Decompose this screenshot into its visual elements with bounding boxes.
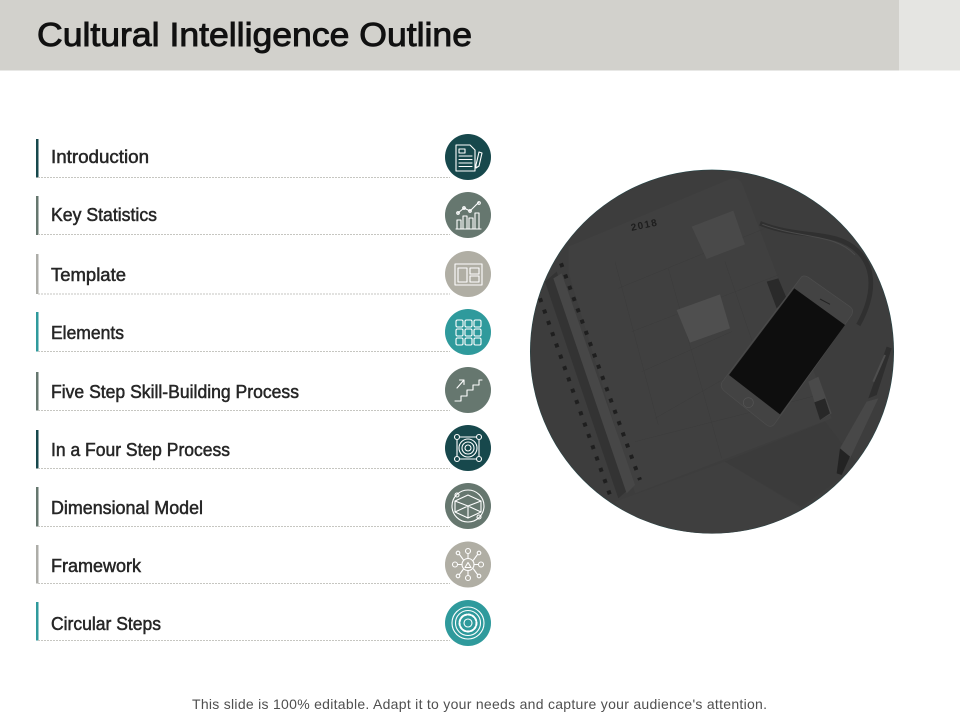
list item: Dimensional Model: Dimensional Model <box>51 498 203 518</box>
list item: Introduction: Introduction <box>51 147 149 167</box>
phone screen <box>729 288 845 414</box>
spiral binding <box>545 272 633 498</box>
list item: Five Step Skill-Building Process: Five Step Skill-Building Process <box>51 382 299 402</box>
icon: document and pen <box>445 134 491 180</box>
icon: circular steps gear <box>445 600 491 646</box>
icon: four step cycle <box>445 425 491 471</box>
list item: In a Four Step Process: In a Four Step Process <box>51 440 230 460</box>
planner year: 2018 <box>630 217 659 234</box>
dotted speaker and pen at right <box>840 398 878 458</box>
footer caption: This slide is 100% editable. Adapt it to your needs and capture your audience's attention. <box>192 696 767 712</box>
icon: bar and line chart <box>445 192 491 238</box>
list item: Framework: Framework <box>51 556 142 576</box>
watch strap <box>767 278 787 308</box>
calendar photo squares <box>692 211 745 259</box>
phone home button <box>743 398 753 408</box>
icon: dimensional cube <box>445 483 491 529</box>
planner grid <box>615 228 818 458</box>
list item: Template: Template <box>51 265 126 285</box>
title: Cultural Intelligence Outline <box>37 16 472 53</box>
icon: layout template <box>445 251 491 297</box>
photo: planner and phone on a desk <box>525 165 902 542</box>
planner page <box>568 178 832 493</box>
phone body <box>721 276 853 426</box>
list item: Elements: Elements <box>51 323 124 343</box>
list item: Circular Steps: Circular Steps <box>51 614 161 634</box>
cable <box>760 223 871 325</box>
icon: grid of elements <box>445 309 491 355</box>
icon: stairs with arrow <box>445 367 491 413</box>
desk shadow below planner <box>618 507 793 534</box>
icon: framework network <box>445 542 491 588</box>
header band <box>0 0 960 70</box>
list item: Key Statistics: Key Statistics <box>51 205 157 225</box>
